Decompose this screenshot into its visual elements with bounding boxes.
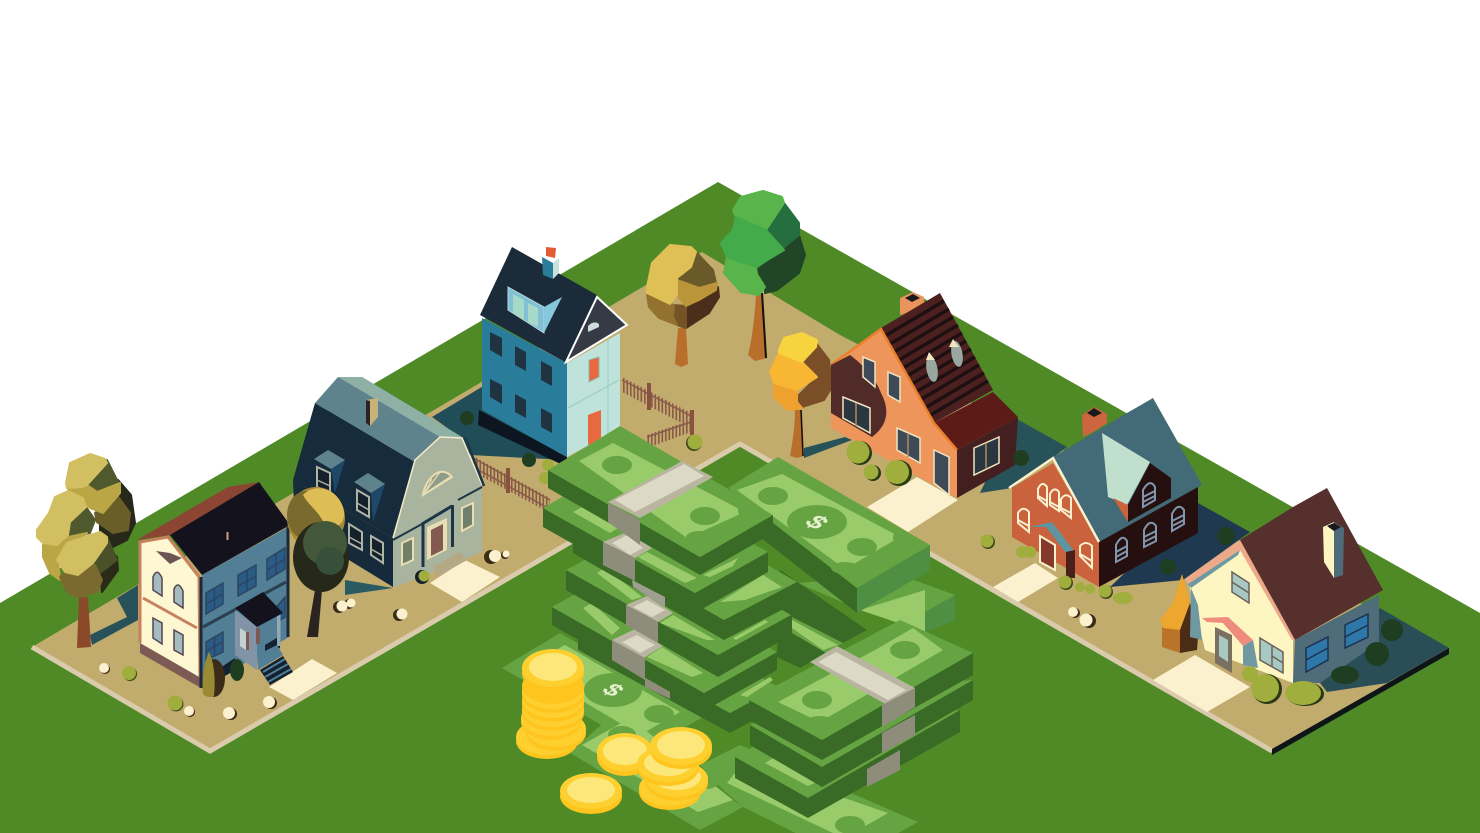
tree: green [721,191,805,361]
roof vents [924,355,940,383]
door and porch [1040,536,1055,570]
roof [137,482,259,540]
chimney [542,247,559,279]
cream wall [139,537,200,678]
money stack: lower right bottom [735,710,960,818]
shrubs and rocks: brick lot [980,527,1235,628]
front wall [393,437,482,588]
house: cream with brown roof [1185,488,1383,683]
money stack: large bill with dollar [728,457,930,613]
chimney [1323,522,1334,578]
money stack: dark layer [777,570,867,668]
green ground [0,182,1480,833]
money stack: layer three [566,530,791,677]
money stack: layer five [578,602,778,733]
gold coin: single [560,773,622,814]
tree: yellow orange [770,333,832,458]
shrubs: cream house [1242,619,1403,706]
house: cream and blue [137,482,293,688]
flat bills on the ground: $ [595,680,631,701]
tree: gold behind [287,487,345,549]
shrubs by blue house [460,411,702,484]
roof [480,247,597,362]
house: orange brick [831,292,1018,498]
shrubs by orange house [846,440,1029,486]
tree: dark green [293,521,349,637]
sidewalks [269,477,1250,712]
walls [831,330,957,498]
paper band [608,461,713,518]
gold coin: middle [597,733,653,776]
gable [566,297,627,362]
tree: orange cone [1160,574,1198,653]
awning [1202,617,1253,646]
arch window [423,472,452,495]
money stack: layer two [573,495,797,640]
windows [1306,614,1368,672]
tan lots [32,252,1449,755]
shrub by steps [415,570,430,584]
paper band [626,596,673,622]
dark wall and lower roof [293,480,393,587]
flat bills on the ground [502,633,918,833]
chimney [900,292,924,315]
mint wall [567,333,620,457]
money stack: layer four [552,566,777,711]
upper roof [315,377,462,462]
door [1215,627,1232,673]
dormer [1102,433,1150,505]
base [478,410,567,467]
roof [1240,488,1383,640]
money stack: lower right top with band [749,620,973,760]
house: blue with mint gable [478,247,627,467]
tree: golden [647,245,719,367]
blue wall [482,318,567,457]
left fence [473,456,550,513]
walls [1188,547,1293,683]
roof [1053,398,1202,542]
gold coins: short stack [637,727,712,810]
roof [881,293,993,423]
house: brick with teal roof [1009,398,1202,587]
tree: olive left [37,454,135,648]
windows [843,357,999,495]
blue wall [202,527,289,688]
paper band [603,532,652,558]
shrubs and rocks: left lot [99,550,510,720]
chimney [1082,407,1107,437]
money stack: layer one [543,467,768,613]
house: dark blue gambrel [293,377,484,588]
cypress and shrub [203,652,244,697]
paper band [810,646,915,705]
money stack: back right [798,575,955,632]
gold coins: tall stack [516,649,586,759]
porch [235,610,257,670]
dormer [508,287,544,333]
money stack: top with band [548,426,773,575]
dormers [331,460,345,493]
money stack: lower right middle [750,680,973,787]
arched windows [1116,483,1184,562]
money stack: large bill with dollar: $ [798,511,837,533]
back fence [622,377,692,448]
walls [1012,463,1099,587]
paper band [612,629,663,660]
